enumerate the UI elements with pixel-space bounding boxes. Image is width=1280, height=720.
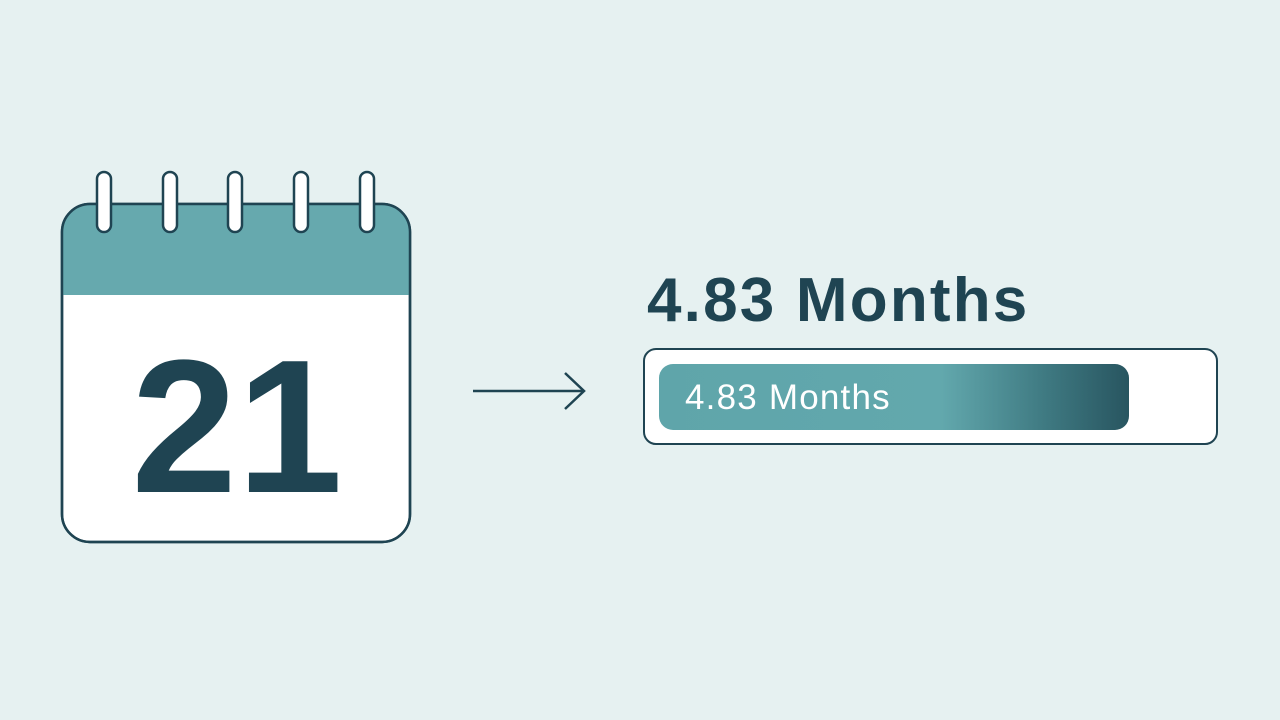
calendar number: 21 xyxy=(131,321,343,533)
arrow xyxy=(473,372,586,410)
heading: 4.83 Months: 4.83 Months xyxy=(647,266,1030,335)
icon: calendar xyxy=(60,170,412,544)
bar fill xyxy=(659,364,1129,430)
progress bar xyxy=(643,348,1218,445)
bar label: 4.83 Months xyxy=(685,378,891,417)
